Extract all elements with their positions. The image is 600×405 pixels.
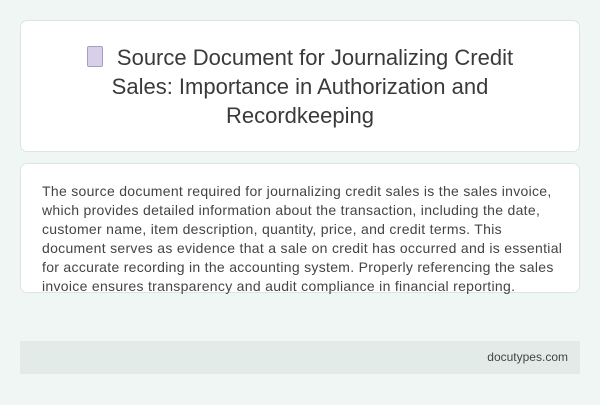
title: Source Document for Journalizing Credit Sales: Importance in Authorization and Recordkeeping xyxy=(112,45,513,128)
text block: for accurate recording in the accounting system. Properly referencing the sales xyxy=(42,259,554,275)
text block: invoice ensures transparency and audit compliance in financial reporting. xyxy=(42,278,515,294)
text block: which provides detailed information about the transaction, including the date, xyxy=(42,202,540,218)
text block: document serves as evidence that a sale on credit has occurred and is essential xyxy=(42,240,562,256)
text block: customer name, item description, quantity, price, and credit terms. This xyxy=(42,221,502,237)
panel: description xyxy=(20,163,580,293)
panel: title xyxy=(20,20,580,152)
icon: document xyxy=(87,46,103,67)
footer: docutypes.com xyxy=(487,350,568,364)
footer xyxy=(20,341,580,374)
text block xyxy=(42,183,562,294)
text block: The source document required for journalizing credit sales is the sales invoice, xyxy=(42,183,552,199)
